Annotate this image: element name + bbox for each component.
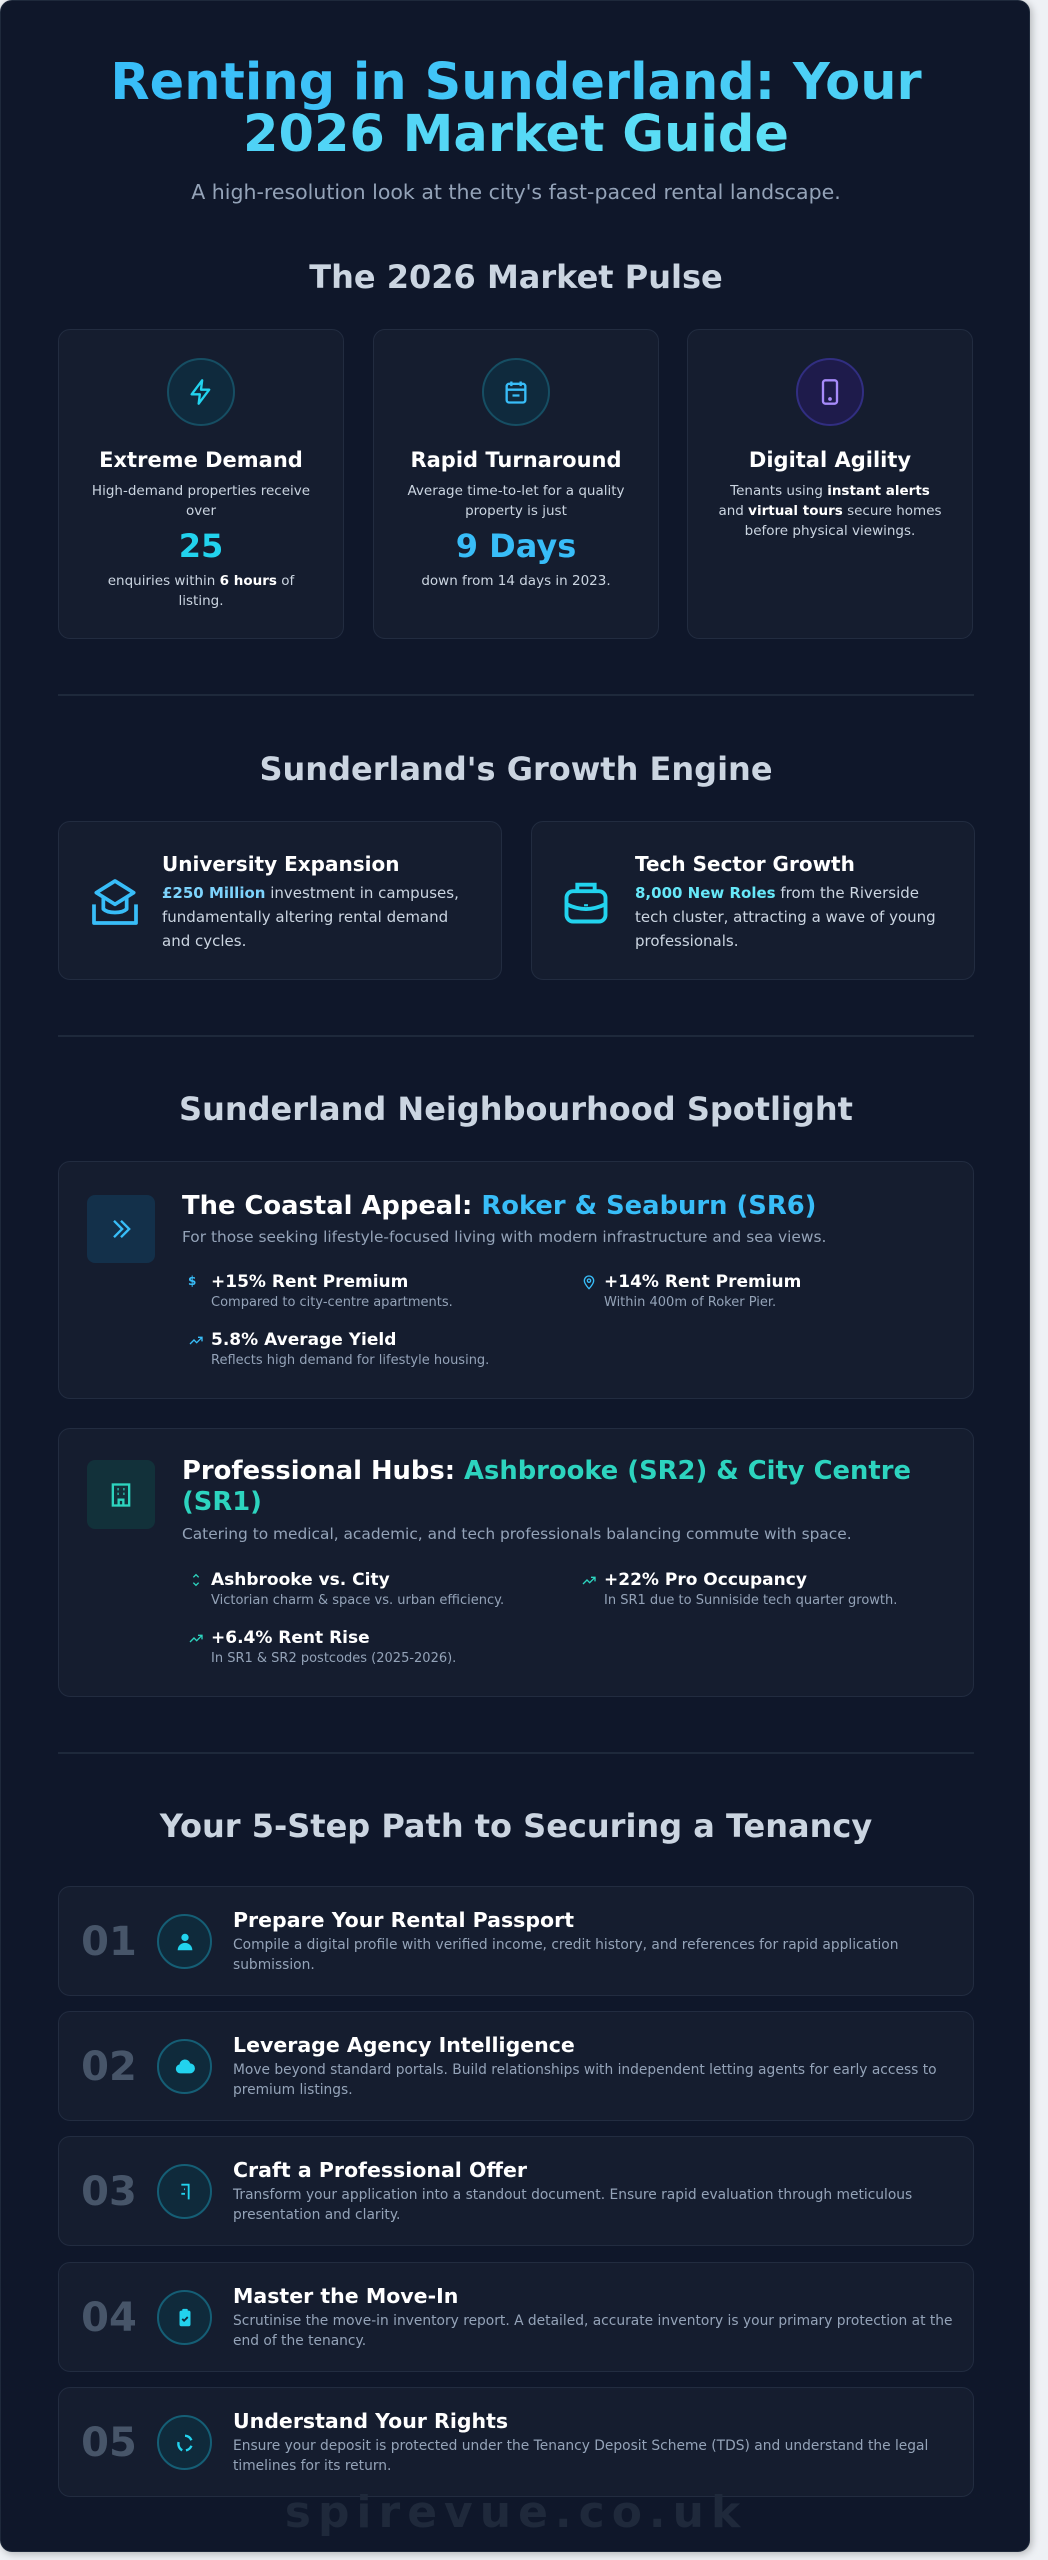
heading: growth engine: Sunderland's Growth Engine <box>259 750 773 788</box>
panel: digital agility: Digital Agility <box>749 448 911 472</box>
step 4 <box>58 2262 974 2372</box>
stat: ashbrooke vs city: Victorian charm & space vs. urban efficiency. <box>211 1593 504 1608</box>
step 5: Understand Your Rights <box>233 2409 508 2433</box>
icon: person <box>157 1914 212 1969</box>
icon: graduation <box>92 879 138 925</box>
step 2: Move beyond standard portals. Build relationships with independent letting agents for early access to premium listings. <box>233 2062 937 2098</box>
stat: +22%: In SR1 due to Sunniside tech quarter growth. <box>604 1593 897 1608</box>
panel: professional hubs: Professional Hubs: Ashbrooke (SR2) & City Centre (SR1) <box>182 1456 911 1517</box>
panel: extreme demand: 25 <box>179 527 223 565</box>
step 2: Leverage Agency Intelligence <box>233 2033 575 2057</box>
stat: +14%: +14% Rent Premium <box>604 1272 801 1292</box>
watermark: spirevue.co.uk <box>285 2487 747 2538</box>
panel: rapid turnaround: Rapid Turnaround <box>410 448 622 472</box>
step 3: 03 <box>81 2169 137 2215</box>
step 2: 02 <box>81 2044 137 2090</box>
step 3 <box>58 2136 974 2246</box>
icon: briefcase <box>564 882 608 924</box>
title <box>110 53 922 164</box>
panel: extreme demand: enquiries within 6 hours of listing. <box>108 573 294 609</box>
step 1: Compile a digital profile with verified income, credit history, and references for rapid application submission. <box>233 1937 898 1973</box>
title: Renting in Sunderland: Your <box>110 53 922 112</box>
stat: +6.4% <box>190 1628 456 1666</box>
panel: extreme demand: High-demand properties receive over <box>92 483 310 519</box>
subtitle: A high-resolution look at the city's fast-paced rental landscape. <box>191 180 841 204</box>
icon: lightning <box>167 358 235 426</box>
panel: professional hubs: Catering to medical, academic, and tech professionals balancing commute with space. <box>182 1525 852 1543</box>
stat: +22%: +22% Pro Occupancy <box>604 1570 807 1590</box>
panel: tech sector <box>531 821 975 980</box>
stat: +15%: Compared to city-centre apartments. <box>211 1295 453 1310</box>
step 5 <box>58 2387 974 2497</box>
panel: digital agility <box>687 329 973 639</box>
step 3: Craft a Professional Offer <box>233 2158 527 2182</box>
stat: yield <box>190 1330 489 1368</box>
title: 2026 Market Guide <box>243 105 789 164</box>
panel: rapid turnaround: 9 Days <box>456 527 576 565</box>
stat: yield: Reflects high demand for lifestyle housing. <box>211 1353 489 1368</box>
stat: +15%: +15% Rent Premium <box>211 1272 408 1292</box>
step 1: 01 <box>81 1919 137 1965</box>
panel: tech sector: 8,000 New Roles from the Riverside tech cluster, attracting a wave of young professionals. <box>635 884 936 950</box>
step 5: Ensure your deposit is protected under the Tenancy Deposit Scheme (TDS) and understand the legal timelines for its return. <box>233 2438 928 2474</box>
icon: clipboard <box>157 2290 212 2345</box>
icon: door <box>157 2164 212 2219</box>
stat: ashbrooke vs city <box>192 1570 504 1608</box>
step 5: 05 <box>81 2420 137 2466</box>
panel: extreme demand <box>58 329 344 639</box>
panel: university expansion <box>58 821 502 980</box>
panel: coastal appeal <box>58 1161 974 1399</box>
heading: 5-step path: Your 5-Step Path to Securing a Tenancy <box>160 1807 872 1845</box>
panel: digital agility: Tenants using instant alerts <box>730 483 930 499</box>
panel: professional hubs <box>58 1428 974 1697</box>
panel: rapid turnaround: down from 14 days in 2023. <box>421 573 611 589</box>
step 4: Master the Move-In <box>233 2284 458 2308</box>
step 3: Transform your application into a standout document. Ensure rapid evaluation through meticulous presentation and clarity. <box>233 2187 912 2223</box>
stat: +15%: $ <box>188 1274 196 1288</box>
stat: +14%: Within 400m of Roker Pier. <box>604 1295 776 1310</box>
icon: phone <box>796 358 864 426</box>
icon: chevrons <box>87 1195 155 1263</box>
step 2 <box>58 2011 974 2121</box>
stat: +6.4%: +6.4% Rent Rise <box>211 1628 370 1648</box>
stat: +22% <box>582 1570 897 1608</box>
panel: rapid turnaround <box>373 329 659 639</box>
panel: digital agility: and virtual tours secure homes before physical viewings. <box>718 503 942 539</box>
step 1: Prepare Your Rental Passport <box>233 1908 574 1932</box>
stat: yield: 5.8% Average Yield <box>211 1330 396 1350</box>
stat: +15% <box>188 1272 453 1310</box>
stat: ashbrooke vs city: Ashbrooke vs. City <box>211 1570 390 1590</box>
icon: cloud <box>157 2039 212 2094</box>
icon: building <box>87 1460 155 1529</box>
panel: tech sector: Tech Sector Growth <box>635 852 855 876</box>
panel: extreme demand: Extreme Demand <box>99 448 303 472</box>
heading: market pulse: The 2026 Market Pulse <box>309 258 723 296</box>
heading: neighbourhood spotlight: Sunderland Neighbourhood Spotlight <box>179 1090 853 1128</box>
step 1 <box>58 1886 974 1996</box>
panel: rapid turnaround: Average time-to-let for a quality property is just <box>407 483 624 519</box>
step 4: 04 <box>81 2295 137 2341</box>
panel: university expansion: University Expansion <box>162 852 399 876</box>
stat: +6.4%: In SR1 & SR2 postcodes (2025-2026). <box>211 1651 456 1666</box>
panel: coastal appeal: For those seeking lifestyle-focused living with modern infrastructure and sea views. <box>182 1228 826 1246</box>
stat: +14% <box>584 1272 801 1310</box>
icon: calendar <box>482 358 550 426</box>
panel: university expansion: £250 Million investment in campuses, fundamentally altering rental demand and cycles. <box>162 884 459 950</box>
panel: coastal appeal: The Coastal Appeal: Roker & Seaburn (SR6) <box>182 1191 816 1221</box>
step 4: Scrutinise the move-in inventory report. A detailed, accurate inventory is your primary protection at the end of the tenancy. <box>233 2313 953 2349</box>
icon: cycle <box>157 2415 212 2470</box>
